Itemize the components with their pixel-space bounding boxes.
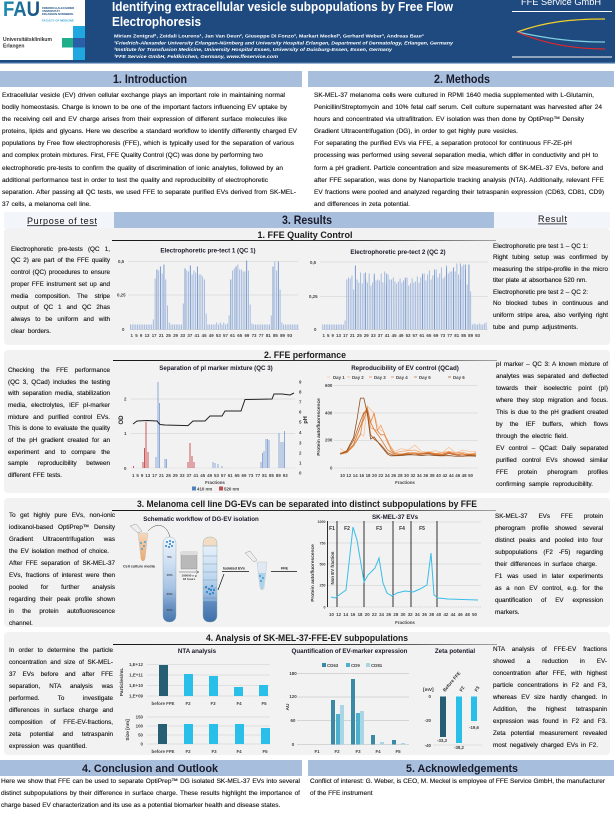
chart: zeta potential: -33,3 bbox=[437, 738, 448, 743]
chart: separation of pI marker mixture: Separation of pI marker mixture (QC 3) bbox=[159, 365, 273, 372]
text block: result of QC test bbox=[493, 242, 608, 331]
chart: SK-MEL-37 EVs pherogram: SK-MEL-37 EVs bbox=[372, 514, 419, 521]
heading bar: 1. Introduction bbox=[0, 71, 302, 87]
chart: SK-MEL-37 EVs pherogram: 0 bbox=[324, 606, 326, 610]
chart: NTA size bbox=[125, 714, 270, 754]
text block: result of QC test: No blocked tubes in continuous and bbox=[493, 300, 608, 307]
heading bar: 1. Introduction: 1. Introduction bbox=[113, 74, 187, 86]
text block: DG-EV isolation description: in the protein autofluorescence bbox=[9, 608, 115, 615]
heading bar: 4. Conclusion and Outlook: 4. Conclusion and Outlook bbox=[82, 763, 219, 775]
text block: pherogram result: markers. bbox=[495, 609, 520, 616]
chart: quantification of EV-marker expression: F1 bbox=[314, 749, 320, 754]
text block: purpose of performance test: sample reproducibility between bbox=[8, 460, 110, 467]
text block: result of performance test: confirming sample reproducibility. bbox=[496, 481, 593, 488]
panel: FFE performance bbox=[4, 350, 610, 493]
text block: pherogram result: F1 was used in later experiments bbox=[495, 573, 603, 580]
text block: methods: Penicillin/Streptomycin and 10% fetal calf serum. Cell culture supernatant was harvested after 24 bbox=[314, 104, 602, 111]
text block: introduction: proteins, lipids and glycans. Here we describe a standard workflow to identify differently charged EV bbox=[2, 128, 297, 135]
subheading: 4. Analysis of SK-MEL-37-FFE-EV subpopulations: 4. Analysis of SK-MEL-37-FFE-EV subpopulations bbox=[206, 633, 408, 643]
text block: purpose of QC test: always to be uniform and with bbox=[11, 316, 110, 323]
chart: separation of pI marker mixture: 9 bbox=[299, 380, 302, 384]
text block: conclusion: Here we show that FFE can be used to separate OptiPrep™ DG isolated SK-MEL-37 EVs into several bbox=[1, 778, 300, 785]
chart: NTA size: F2 bbox=[185, 749, 191, 754]
FFE Service GmbH logo bbox=[512, 0, 612, 58]
text block: result of performance test: towards their isoelectric point (pI) bbox=[496, 385, 608, 392]
text block: result of performance test bbox=[496, 361, 608, 488]
chart: electrophoretic pre-test 2: 1 5 9 13 17 21 25 29 33 37 41 45 49 53 57 61 65 69 73 77 81 85 89 93 bbox=[322, 333, 481, 338]
text block: pherogram result: distinct peaks and pooled into four bbox=[495, 537, 603, 544]
chart: zeta potential: Before FFE bbox=[442, 671, 462, 693]
chart: reproducibility of EV control: Day 1 bbox=[333, 375, 345, 380]
chart: SK-MEL-37 EVs pherogram: 250 bbox=[320, 584, 326, 588]
chart: electrophoretic pre-test 2: 0,5 bbox=[310, 260, 317, 265]
text block: pherogram result bbox=[495, 513, 603, 616]
chart: reproducibility of EV control: Protein autofluorescence bbox=[316, 398, 322, 456]
chart: quantification of EV-marker expression: F2 bbox=[334, 749, 340, 754]
text block: DG-EV isolation description: iodixanol-based OptiPrep™ Density bbox=[9, 524, 115, 531]
text block: introduction: electrophoretic pre-tests to confirm the quality of discrimination of ionic analytes, followed by an bbox=[2, 165, 283, 172]
text block: result of performance test: analytes was separated and deflected bbox=[496, 373, 608, 380]
text block: result of performance test: purified control EVs showed similar bbox=[496, 457, 608, 464]
text block: introduction: populations by Free flow electrophoresis (FFE), which is typically used for the separation of various bbox=[2, 140, 294, 147]
chart: quantification of EV-marker expression: 120 bbox=[289, 694, 297, 699]
chart: reproducibility of EV control: Fractions bbox=[395, 480, 415, 485]
heading bar: 3. Results bbox=[114, 212, 494, 228]
authors and affiliations: Miriam Zentgraf¹, Zeidali Lourens¹, Jan Van Deun², Giuseppe Di Fonzo³, Markart Meckel³, Gerhard Weber³, Andreas Baur¹ bbox=[114, 34, 425, 38]
text block: analysis result: Zeta potential measurement revealed bbox=[493, 730, 607, 737]
text block: introduction: Extracellular vesicle (EV) driven cellular exchange plays an important role in maintaining normal bbox=[2, 92, 285, 99]
text block: acknowledgements: Conflict of interest: G. Weber, is CEO, M. Meckel is employee of FFE Service GmbH, the manufacturer bbox=[310, 778, 605, 785]
chart: separation of pI marker mixture: 520 nm bbox=[224, 486, 239, 492]
text block: DG-EV isolation description: regarding their peak profile shown bbox=[9, 596, 115, 603]
chart: zeta potential: -38,2 bbox=[454, 745, 465, 750]
chart: reproducibility of EV control: 600 bbox=[325, 383, 333, 388]
chart: separation of pI marker mixture: 6 bbox=[299, 410, 302, 414]
chart: reproducibility of EV control: 10 12 14 16 18 20 22 24 26 28 30 32 34 36 38 40 42 44 46 48 50 bbox=[340, 473, 474, 478]
icon: density gradient tube bbox=[163, 537, 176, 622]
chart: NTA size: F3 bbox=[211, 749, 217, 754]
text block: methods: after FFE separation, was done by Nanoparticle tracking analysis (NTA). Additionally, relevant FFE bbox=[314, 177, 604, 184]
text block: purpose of QC test: clear borders. bbox=[11, 328, 51, 335]
text block: analysis description: concentration and size of SK-MEL- bbox=[9, 658, 113, 666]
chart: separation of pI marker mixture: 4 bbox=[299, 430, 302, 435]
chart: SK-MEL-37 EVs pherogram: Fractions bbox=[395, 620, 415, 625]
icon: separated fractions tube bbox=[203, 537, 217, 622]
logo panel: FAU and Universitätsklinikum: FRIEDRICH-ALEXANDER bbox=[42, 6, 74, 10]
text block: introduction: separation. After passing all QC tests, we used FFE to separate purified EVs derived from SK-MEL- bbox=[2, 189, 296, 196]
chart: reproducibility of EV control: Reproducibility of EV control (QCad) bbox=[351, 365, 459, 372]
authors and affiliations: ²Institute for Transfusion Medicine, University Hospital Essen, University of Duisburg-Essen, Essen, Germany bbox=[114, 47, 392, 52]
logo panel: FAU and Universitätsklinikum: UNIVERSITÄT bbox=[42, 9, 60, 13]
text block: analysis description: zeta potential and tetraspanin bbox=[9, 730, 113, 738]
chart: separation of pI marker mixture: 1 bbox=[299, 460, 302, 466]
chart: reproducibility of EV control: Day 2 bbox=[352, 375, 364, 380]
chart: NTA particle concentration: F3 bbox=[210, 701, 216, 706]
chart: separation of pI marker mixture: 2 bbox=[299, 450, 302, 456]
chart: quantification of EV-marker expression bbox=[285, 648, 409, 754]
text block: purpose of performance test: with separation media, stabilization bbox=[8, 390, 110, 397]
chart: separation of pI marker mixture: 1 bbox=[124, 431, 127, 436]
text block: result of QC test: measuring the stripe-profile in the micro bbox=[493, 266, 608, 273]
logo panel: FAU and Universitätsklinikum: ERLANGEN-NÜRNBERG bbox=[42, 12, 74, 16]
chart: separation of pI marker mixture: 3 bbox=[299, 440, 302, 446]
logo panel: FAU and Universitätsklinikum: Erlangen bbox=[3, 44, 24, 50]
chart: NTA size: F5 bbox=[262, 749, 268, 754]
text block: analysis result: expression was found in F2 and F3. bbox=[493, 718, 607, 725]
chart: NTA particle concentration: Particles/mL bbox=[119, 668, 125, 696]
text block: result of QC test: Right tubing setup was confirmed by bbox=[493, 254, 608, 261]
chart: electrophoretic pre-test 1: 0,25 bbox=[117, 292, 126, 298]
text block: DG-EV isolation description: After FFE separation of SK-MEL-37 bbox=[9, 560, 115, 567]
chart: NTA particle concentration: F4 bbox=[236, 701, 242, 706]
chart: NTA particle concentration bbox=[119, 648, 270, 706]
header banner bbox=[0, 0, 615, 64]
text block: methods: processing was performed using several separation media, which differ in conductivity and pH to bbox=[314, 152, 598, 159]
chart: quantification of EV-marker expression: 180 bbox=[289, 671, 297, 676]
text block: DG-EV isolation description: EVs, fractions of interest were then bbox=[9, 572, 115, 579]
schematic workflow of DG-EV isolation bbox=[123, 516, 297, 622]
text block: purpose of performance test bbox=[8, 367, 110, 479]
text block: acknowledgements: of the FFE instrument bbox=[310, 790, 372, 796]
label: isolated EVs: Isolated EVs bbox=[223, 566, 245, 570]
chart: reproducibility of EV control: Day 3 bbox=[374, 375, 386, 380]
chart: SK-MEL-37 EVs pherogram: F4 bbox=[399, 526, 405, 532]
chart: separation of pI marker mixture: 5 bbox=[299, 420, 302, 424]
text block: analysis description bbox=[9, 646, 113, 750]
chart: NTA particle concentration: F2 bbox=[185, 701, 191, 706]
chart: NTA size: 50 bbox=[138, 732, 144, 738]
chart: SK-MEL-37 EVs pherogram: F2 bbox=[344, 526, 350, 532]
arrow: transfer to gradient tube bbox=[148, 525, 170, 537]
tab: Purpose of test: Purpose of test bbox=[27, 216, 97, 226]
text block: methods: form a pH gradient. Particle concentration and size measurements of SK-MEL-37 EVs, before and bbox=[314, 165, 603, 172]
text block: purpose of performance test: Checking the FFE performance bbox=[8, 367, 110, 374]
text block: analysis result: showed a reduction in EV- bbox=[493, 658, 607, 665]
text block: purpose of QC test bbox=[11, 246, 110, 335]
chart: quantification of EV-marker expression: AU bbox=[285, 703, 291, 710]
chart: SK-MEL-37 EVs pherogram: Non EV fraction bbox=[330, 551, 335, 584]
chart: separation of pI marker mixture: 7 bbox=[299, 400, 302, 404]
text block: analysis result: whereas EV size hardly changed. In bbox=[493, 694, 607, 701]
icon: density gradient tube: 20% bbox=[166, 592, 173, 596]
text block: methods: SK-MEL-37 melanoma cells were cultured in RPMI 1640 media supplemented with L-Glutamin, bbox=[314, 92, 594, 99]
chart: zeta potential bbox=[423, 648, 482, 750]
chart: separation of pI marker mixture: 1 5 9 13 17 21 25 29 33 37 41 45 49 53 57 61 65 69 73 77 81 85 89 93 bbox=[132, 473, 288, 478]
text block: purpose of performance test: (QC 3, QCad) includes the testing bbox=[8, 379, 110, 386]
chart: zeta potential: Zeta potential bbox=[435, 648, 475, 655]
chart: SK-MEL-37 EVs pherogram bbox=[310, 514, 481, 625]
chart: NTA particle concentration: NTA analysis bbox=[178, 648, 217, 655]
text block: purpose of QC test: control (QC) procedures to ensure bbox=[11, 269, 110, 276]
chart: quantification of EV-marker expression: 0 bbox=[292, 742, 295, 747]
chart: zeta potential: -19,6 bbox=[469, 725, 480, 730]
text block: result of performance test: by the IEF buffers, which flows bbox=[496, 421, 608, 428]
heading bar: 3. Results: 3. Results bbox=[282, 215, 332, 227]
text block: analysis result: particle concentrations in F2 and F3, bbox=[493, 682, 607, 689]
chart: zeta potential: F2 bbox=[459, 685, 466, 692]
text block: purpose of performance test: experiment and to compare the bbox=[8, 449, 110, 456]
poster title bbox=[112, 0, 454, 29]
chart: NTA size: 100 bbox=[136, 724, 144, 728]
text block: result of performance test: This is due to the pH gradient created bbox=[496, 409, 608, 416]
chart: NTA particle concentration: before FFE bbox=[152, 701, 175, 706]
chart: NTA size: before FFE bbox=[152, 749, 175, 754]
text block: introduction: bodily homeostasis. Charge is known to be one of the important factors influencing EV uptake by bbox=[2, 104, 287, 111]
heading bar: 5. Acknowledgements: 5. Acknowledgements bbox=[406, 763, 518, 775]
poster title: Electrophoresis bbox=[112, 14, 201, 29]
subheading: 1. FFE Quality Control: 1. FFE Quality Control bbox=[258, 230, 352, 240]
icon: ultracentrifuge bbox=[179, 552, 199, 581]
chart: separation of pI marker mixture: 0 bbox=[124, 466, 127, 471]
chart: separation of pI marker mixture: 410 nm bbox=[197, 486, 212, 492]
chart: quantification of EV-marker expression: CD63 bbox=[327, 663, 339, 668]
text block: pherogram result: as a non EV control, e.g. for the bbox=[495, 585, 603, 592]
text block: result of QC test: tube and pump adjustments. bbox=[493, 324, 578, 331]
text block: DG-EV isolation description: channel. bbox=[9, 620, 33, 627]
chart: NTA size: 150 bbox=[136, 714, 144, 720]
chart: SK-MEL-37 EVs pherogram: 750 bbox=[320, 542, 326, 546]
text block: purpose of QC test: media composition. The stripe bbox=[11, 293, 110, 300]
chart: quantification of EV-marker expression: CD9 bbox=[351, 663, 360, 668]
text block: analysis result: most negatively charged EVs in F2. bbox=[493, 742, 598, 749]
chart: reproducibility of EV control: 0 bbox=[330, 466, 333, 470]
chart: SK-MEL-37 EVs pherogram: 500 bbox=[320, 562, 326, 566]
text block: DG-EV isolation description: To get highly pure EVs, non-ionic bbox=[9, 512, 115, 519]
chart: SK-MEL-37 EVs pherogram: F3 bbox=[376, 526, 382, 532]
subheading: 2. FFE performance: 2. FFE performance bbox=[264, 350, 346, 360]
chart: electrophoretic pre-test 2: Electrophoretic pre-tect 2 (QC 2) bbox=[350, 249, 446, 256]
chart: electrophoretic pre-test 2: 0,25 bbox=[309, 294, 318, 299]
text block: purpose of performance test: different FFE tests. bbox=[8, 472, 62, 479]
authors and affiliations bbox=[114, 34, 453, 59]
label: isolated EVs bbox=[218, 566, 249, 590]
chart: electrophoretic pre-test 1: Electrophoretic pre-tect 1 (QC 1) bbox=[160, 248, 256, 254]
label: to FFE: FFE bbox=[281, 566, 289, 570]
chart: quantification of EV-marker expression: F5 bbox=[395, 749, 401, 754]
logo panel: FAU and Universitätsklinikum: FACULTY OF MEDICINE bbox=[42, 18, 74, 22]
text block: methods: Gradient Ultracentrifugation (DG), in order to get highly pure vesicles. bbox=[314, 128, 518, 135]
icon: ultracentrifuge: 100000 x g bbox=[181, 574, 197, 578]
text block: analysis description: expression was quantified. bbox=[9, 742, 87, 750]
icon: density gradient tube: 10% bbox=[166, 573, 173, 577]
text block: acknowledgements bbox=[310, 778, 605, 796]
text block: result of QC test: Electrophoretic pre test 1 – QC 1: bbox=[493, 242, 588, 250]
text block: introduction: the receiving cell and EV charge arises from their expression of different surface molecules like bbox=[2, 116, 287, 123]
icon: small tube with cell culture media bbox=[123, 524, 156, 568]
text block: DG-EV isolation description bbox=[9, 512, 115, 627]
text block: analysis description: separation, NTA analysis was bbox=[9, 682, 113, 690]
chart: NTA size: F4 bbox=[236, 749, 242, 754]
chart: zeta potential: -20 bbox=[425, 718, 432, 723]
text block: result of QC test: uniform stripe area, also verifying right bbox=[493, 312, 608, 319]
chart: separation of pI marker mixture bbox=[119, 365, 309, 492]
chart: SK-MEL-37 EVs pherogram: 1000 bbox=[318, 520, 326, 524]
chart: NTA particle concentration: 1,E+11 bbox=[129, 672, 144, 678]
text block: analysis result: concentration after FFE, with highest bbox=[493, 670, 607, 677]
chart: reproducibility of EV control: 400 bbox=[325, 410, 333, 416]
text block: purpose of performance test: mixture and purified control EVs. bbox=[8, 414, 110, 421]
text block: purpose of performance test: This is done to evaluate the quality bbox=[8, 425, 110, 432]
text block: analysis description: differences in surface charge and bbox=[9, 706, 113, 714]
text block: methods: EV fractions were pooled and analyzed regarding their tetraspanin expression (CD63, CD81, CD9) bbox=[314, 189, 604, 196]
panel: FFE quality control bbox=[4, 228, 610, 345]
label: to FFE bbox=[271, 566, 297, 572]
schematic workflow of DG-EV isolation: Schematic workflow of DG-EV isolation bbox=[143, 516, 259, 523]
chart: zeta potential: 0 bbox=[429, 694, 432, 699]
text block: methods bbox=[314, 92, 604, 208]
text block: methods: For separating the purified EVs via FFE, a separation protocol for continuous FF-ZE-pH bbox=[314, 140, 572, 147]
chart: quantification of EV-marker expression: CD81 bbox=[371, 663, 383, 668]
chart: zeta potential: -40 bbox=[425, 743, 432, 748]
text block: result of QC test: Electrophoretic pre test 2 – QC 2: bbox=[493, 289, 588, 296]
authors and affiliations: ³FFE Service GmbH, Feldkirchen, Germany, www.ffeservice.com bbox=[114, 54, 278, 59]
chart: reproducibility of EV control bbox=[316, 365, 478, 485]
heading bar: 2. Methods bbox=[308, 71, 614, 87]
chart: quantification of EV-marker expression: 60 bbox=[291, 718, 296, 723]
text block: DG-EV isolation description: the EV isolation method of choice. bbox=[9, 548, 109, 555]
text block: analysis description: performed. To investigate bbox=[9, 694, 113, 702]
chart: electrophoretic pre-test 1: 0 bbox=[122, 327, 125, 332]
icon: density gradient tube: 40% bbox=[166, 608, 173, 612]
chart: reproducibility of EV control: Day 4 bbox=[396, 375, 408, 380]
chart: separation of pI marker mixture: 2 bbox=[124, 396, 127, 402]
icon: density gradient tube: 5% bbox=[167, 555, 172, 559]
chart: electrophoretic pre-test 1: 1 5 9 13 17 21 25 29 33 37 41 45 49 53 57 61 65 69 73 77 81 85 89 93 bbox=[130, 333, 293, 338]
chart: SK-MEL-37 EVs pherogram: Protein autofluorescence bbox=[310, 544, 316, 602]
text block: result of performance test: pI marker – QC 3: A known mixture of bbox=[496, 361, 608, 368]
text block: pherogram result: their differences in surface charge. bbox=[495, 561, 597, 568]
authors and affiliations: ¹Friedrich-Alexander University Erlangen-Nürnberg and University Hospital Erlangen, Department of Dermatology, Erlangen, Germany bbox=[114, 40, 453, 46]
text block: purpose of performance test: media, electrolytes, IEF pI-marker bbox=[8, 402, 110, 409]
chart: quantification of EV-marker expression: Quantification of EV-marker expression bbox=[292, 648, 408, 655]
text block: pherogram result: pherogram profile showed several bbox=[495, 525, 603, 532]
chart: reproducibility of EV control: Day 6 bbox=[453, 375, 465, 380]
text block: purpose of QC test: output of QC 1 and QC 2has bbox=[11, 304, 110, 311]
heading bar: 4. Conclusion and Outlook bbox=[0, 760, 302, 776]
chart: NTA particle concentration: 1,E+09 bbox=[129, 694, 144, 698]
text block: purpose of QC test: proper FFE instrument set up and bbox=[11, 281, 110, 288]
chart: separation of pI marker mixture: 0 bbox=[299, 470, 302, 476]
chart: electrophoretic pre-test 1 bbox=[117, 248, 299, 338]
text block: result of performance test: FFE protein pherogram profiles bbox=[496, 469, 608, 476]
chart: NTA size: Size [nm] bbox=[125, 719, 131, 741]
chart: NTA particle concentration: 1,E+12 bbox=[129, 662, 144, 667]
tab: Result bbox=[494, 212, 610, 228]
text block: purpose of QC test: QC 2) are part of the FFE quality bbox=[11, 257, 110, 264]
chart: electrophoretic pre-test 2 bbox=[309, 249, 488, 338]
panel: melanoma subpopulations bbox=[4, 498, 610, 627]
text block: pherogram result: subpopulations (F2 -F5) regarding bbox=[495, 549, 603, 556]
text block: purpose of QC test: Electrophoretic pre-tests (QC 1, bbox=[11, 246, 110, 252]
text block: analysis description: composition of FFE-EV-fractions, bbox=[9, 718, 113, 726]
text block: result of performance test: where they stop migration and focus. bbox=[496, 397, 608, 404]
text block: analysis description: 37 EVs before and after FFE bbox=[9, 670, 113, 678]
chart: separation of pI marker mixture: Fractions bbox=[205, 480, 225, 485]
panel: SK-MEL-37 analysis bbox=[4, 632, 610, 755]
text block: analysis result bbox=[492, 646, 607, 749]
chart: NTA size: 0 bbox=[141, 742, 144, 746]
text block: introduction bbox=[2, 92, 297, 208]
chart: electrophoretic pre-test 2: 0 bbox=[314, 327, 317, 332]
heading bar: 2. Methods: 2. Methods bbox=[434, 74, 490, 86]
text block: purpose of performance test: of the pH gradient created for an bbox=[8, 437, 110, 444]
text block: analysis description: In order to determine the particle bbox=[9, 646, 113, 654]
icon: isolated EV tube bbox=[245, 551, 267, 590]
icon: small tube with cell culture media: Cell culture media bbox=[123, 564, 156, 568]
text block: pherogram result: quantification of EV expression bbox=[495, 597, 603, 604]
text block: introduction: and complex protein mixtures. First, FFE Quality Control (QC) was done by performing two bbox=[2, 152, 263, 159]
heading bar: 5. Acknowledgements bbox=[308, 760, 614, 776]
text block: DG-EV isolation description: pooled for further analysis bbox=[9, 584, 115, 591]
text block: pherogram result: SK-MEL-37 EVs FFE protein bbox=[495, 513, 603, 520]
chart: SK-MEL-37 EVs pherogram: F5 bbox=[419, 526, 425, 532]
chart: electrophoretic pre-test 1: 0,5 bbox=[118, 259, 125, 264]
chart: separation of pI marker mixture: 8 bbox=[299, 390, 302, 394]
chart: NTA particle concentration: F5 bbox=[261, 701, 267, 706]
text block: result of performance test: EV control – QCad: Daily separated bbox=[496, 445, 608, 452]
subheading: 3. Melanoma cell line DG-EVs: 3. Melanoma cell line DG-EVs can be separated into distinct subpopulations by FFE bbox=[137, 499, 477, 509]
chart: zeta potential: F3 bbox=[474, 685, 481, 692]
logo panel: FAU and Universitätsklinikum: Universitätsklinikum bbox=[3, 37, 52, 43]
chart: NTA particle concentration: 1,E+10 bbox=[129, 683, 144, 688]
chart: reproducibility of EV control: 200 bbox=[325, 438, 333, 442]
icon: ultracentrifuge: 18 hours bbox=[183, 577, 196, 581]
text block: introduction: additional performance test in order to test the quality and reproducibility of electrophoretic bbox=[2, 177, 268, 184]
tab: Purpose of test bbox=[4, 212, 114, 228]
text block: result of performance test: through the electric field. bbox=[496, 433, 568, 440]
chart: zeta potential: [mV] bbox=[423, 687, 434, 693]
text block: conclusion bbox=[1, 778, 300, 809]
chart: SK-MEL-37 EVs pherogram: 10 12 14 16 18 20 22 24 26 28 30 32 34 36 38 40 42 44 46 48 50 bbox=[329, 612, 478, 617]
text block: methods: and differences in zeta potential. bbox=[314, 201, 410, 208]
logo panel: FAU and Universitätsklinikum bbox=[0, 0, 85, 60]
text block: analysis result: Addition, the highest tetraspanin bbox=[493, 706, 607, 713]
chart: separation of pI marker mixture: pH bbox=[303, 416, 309, 424]
chart: separation of pI marker mixture: OD bbox=[119, 415, 125, 424]
text block: introduction: 37 cells, a melanoma cell line. bbox=[2, 201, 91, 208]
chart: reproducibility of EV control: Day 5 bbox=[419, 375, 431, 380]
chart: SK-MEL-37 EVs pherogram: F1 bbox=[329, 526, 335, 532]
text block: conclusion: distinct subpopulations by their difference in surface charge. These results highlight the importance of bbox=[1, 790, 300, 797]
text block: DG-EV isolation description: Gradient Ultracentrifugation was bbox=[9, 536, 115, 543]
text block: analysis result: NTA analysis of FFE-EV fractions bbox=[493, 646, 607, 653]
text block: result of QC test: titer plate at absorbance 520 nm. bbox=[493, 277, 587, 284]
chart: quantification of EV-marker expression: F4 bbox=[375, 749, 381, 754]
text block: methods: hours and concentrated via ultrafiltration. EV isolation was then done by OptiPrep™ Density bbox=[314, 116, 584, 123]
tab: Result: Result bbox=[538, 214, 567, 224]
text block: conclusion: charge based EV characterization and its use as a potential biomarker health and disease states. bbox=[1, 802, 280, 809]
chart: quantification of EV-marker expression: F3 bbox=[355, 749, 361, 754]
